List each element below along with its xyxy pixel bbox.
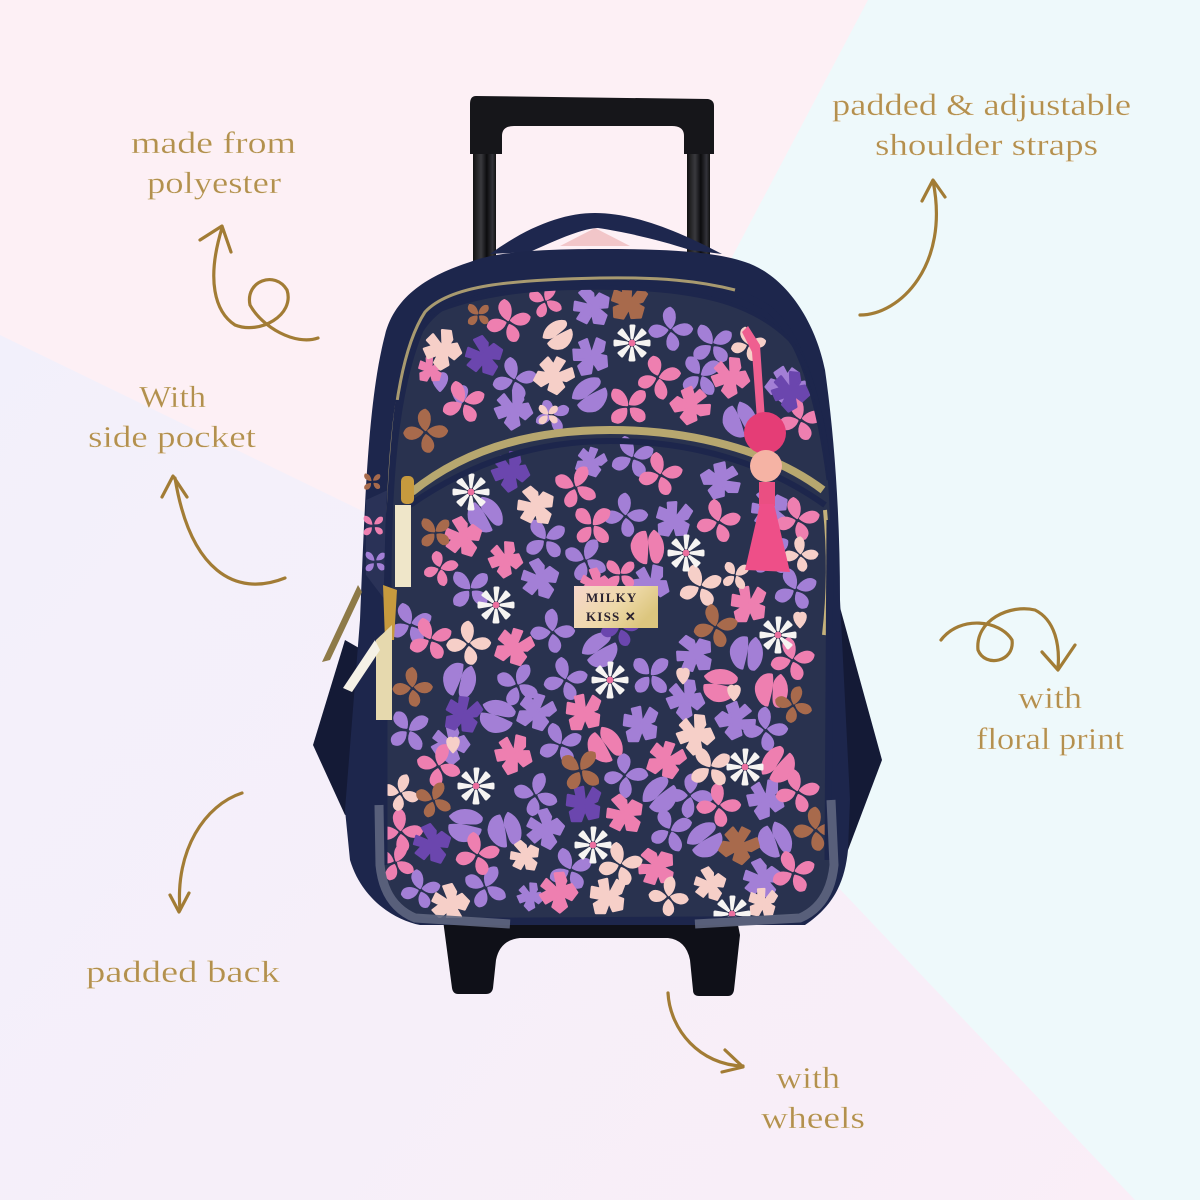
mesh side pockets xyxy=(313,600,882,850)
milky kiss label: MILKY xyxy=(586,590,638,605)
label: with side pocket xyxy=(88,379,256,454)
label: padded and adjustable shoulder straps: shoulder straps xyxy=(875,127,1098,162)
grey corner bumpers xyxy=(379,800,834,924)
label: with floral print xyxy=(976,680,1124,756)
label: padded and adjustable shoulder straps: padded & adjustable xyxy=(832,87,1131,122)
label: with side pocket: side pocket xyxy=(88,419,256,454)
trolley backpack xyxy=(313,96,882,996)
printed front panel xyxy=(384,288,832,918)
label: padded back: padded back xyxy=(86,954,281,989)
label: with wheels: wheels xyxy=(761,1100,865,1135)
carry handle xyxy=(490,213,722,254)
milky kiss label: KISS ✕ xyxy=(586,609,637,624)
arrow: floral print xyxy=(941,609,1075,670)
floral print pattern xyxy=(377,282,839,931)
telescopic handle xyxy=(470,96,714,265)
milky kiss label xyxy=(574,586,658,628)
tassel charm xyxy=(742,326,790,572)
label: with wheels xyxy=(761,1060,865,1135)
zip pullers xyxy=(322,476,414,720)
arrow: side pocket xyxy=(162,476,285,584)
label: padded and adjustable shoulder straps xyxy=(832,87,1131,162)
zippers and piping xyxy=(385,278,832,865)
arrow: polyester xyxy=(200,226,318,340)
arrow: wheels xyxy=(668,993,743,1072)
label: with wheels: with xyxy=(776,1060,841,1095)
label: made from polyester xyxy=(131,125,296,200)
label: made from polyester: made from xyxy=(131,125,296,160)
wheel frame xyxy=(443,920,740,996)
arrow: padded back xyxy=(170,793,242,912)
label: with side pocket: With xyxy=(139,379,207,414)
bag body xyxy=(345,249,850,925)
arrow: shoulder straps xyxy=(860,180,945,315)
side print xyxy=(364,473,388,600)
label: made from polyester: polyester xyxy=(147,165,282,200)
label: with floral print: with xyxy=(1018,680,1083,715)
label: with floral print: floral print xyxy=(976,721,1124,756)
